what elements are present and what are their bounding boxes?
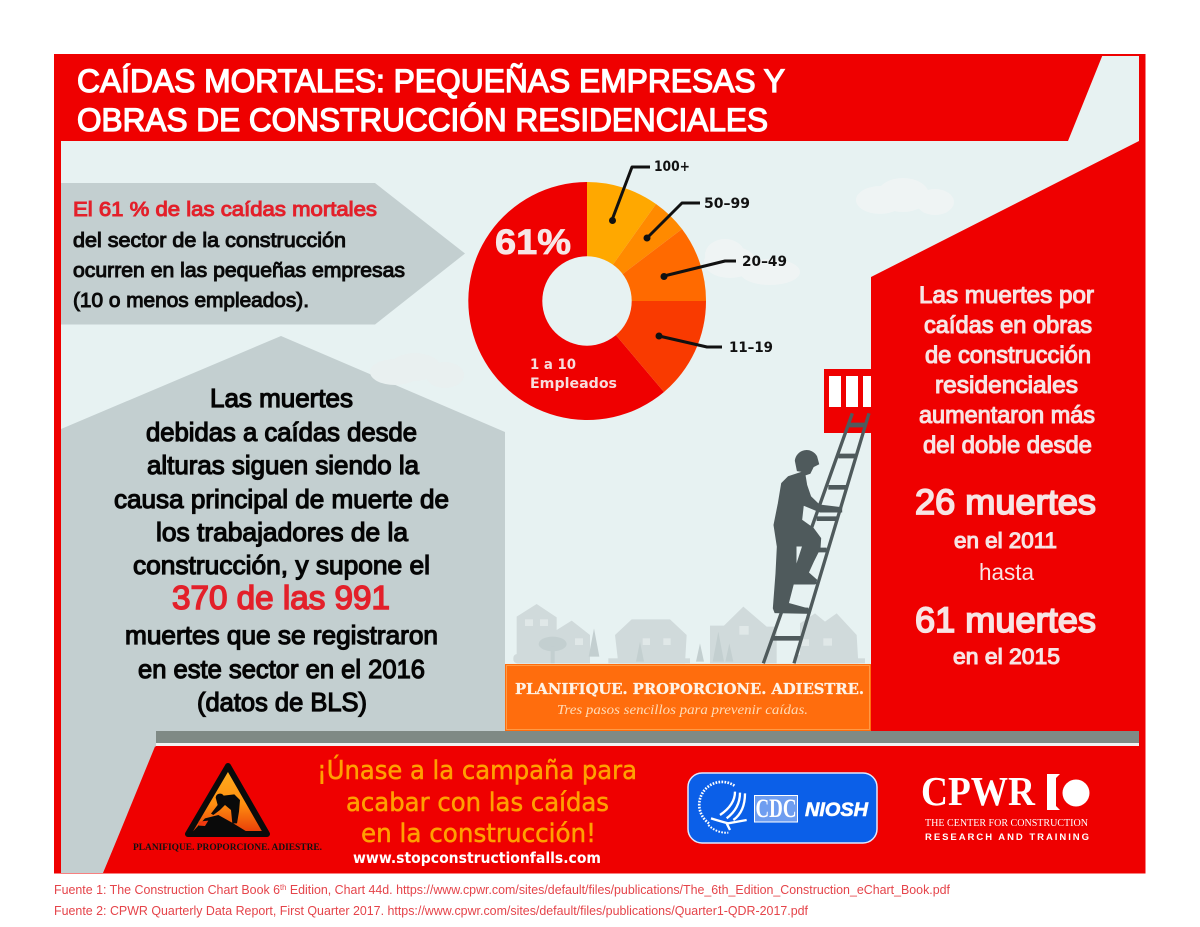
slogan: PLANIFIQUE. PROPORCIONE. ADIESTRE. <box>515 680 864 698</box>
right panel text: caídas en obras <box>924 312 1092 339</box>
bottom red band <box>103 746 1145 874</box>
label: 61%: 61% <box>495 223 571 262</box>
right panel text: 26 muertes <box>915 483 1096 522</box>
leader: 50-99 <box>644 196 750 242</box>
icon: warning triangle with worker <box>133 766 322 853</box>
slice: 100+ <box>587 182 656 301</box>
main statement text: causa principal de muerte de <box>114 484 449 514</box>
slice: 50-99 <box>587 204 682 301</box>
leader: 100+: 100+ <box>654 159 690 175</box>
label: 1 a 10 empleados: 1 a 10 <box>530 357 576 373</box>
right panel text: aumentaron más <box>919 402 1095 429</box>
label: 1 a 10 empleados <box>530 357 617 392</box>
leader: 20-49 <box>660 254 787 280</box>
main statement text: (datos de BLS) <box>197 687 367 717</box>
right panel text: de construcción <box>925 342 1091 369</box>
icon: worker silhouette <box>773 451 842 613</box>
icon: HHS eagle <box>699 782 747 833</box>
subtitle: Tres pasos sencillos para prevenir caídas. <box>557 703 808 718</box>
right panel text: del doble desde <box>923 432 1092 459</box>
source notes: Fuente 2: CPWR Quarterly Data Report, First Quarter 2017. https://www.cpwr.com/sites/default/files/publications/Quarter1-QDR-2017.pdf <box>54 903 808 918</box>
cloud over roof <box>370 353 464 388</box>
right panel text: 61 muertes <box>915 601 1096 640</box>
label: 1 a 10 empleados: Empleados <box>530 376 617 392</box>
campaign call to action <box>317 754 637 867</box>
leader: 20-49: 20–49 <box>742 254 787 270</box>
right panel text: en el 2011 <box>954 528 1057 553</box>
source notes: Edition, Chart 44d. https://www.cpwr.com/sites/default/files/publications/The_6th_Edition_Construction_eChart_Book.pdf <box>286 882 950 897</box>
slice: 11-19 <box>587 301 706 392</box>
panel: gray house with main statement <box>61 336 505 873</box>
main statement text: en este sector en el 2016 <box>138 654 425 684</box>
leader: 11-19: 11–19 <box>729 340 773 356</box>
panel: orange slogan box <box>505 664 871 731</box>
main statement text: los trabajadores de la <box>156 517 409 547</box>
sky panel <box>61 56 1139 745</box>
logo: CPWR: RESEARCH AND TRAINING <box>925 832 1089 843</box>
main statement text: 370 de las 991 <box>172 579 390 616</box>
source notes <box>54 882 950 918</box>
title <box>77 63 785 138</box>
callout text: (10 o menos empleados). <box>73 289 309 312</box>
campaign call to action: ¡Únase a la campaña para <box>317 754 637 786</box>
NIOSH wordmark: NIOSH <box>805 800 869 821</box>
source notes: th <box>280 883 286 892</box>
CDC mark: CDC <box>756 794 796 823</box>
right panel text: residenciales <box>935 372 1078 399</box>
logo: CPWR <box>921 768 1090 843</box>
main statement text: muertes que se registraron <box>125 620 438 650</box>
slice: 20-49 <box>587 229 706 301</box>
logo: CPWR: THE CENTER FOR CONSTRUCTION <box>925 818 1088 829</box>
main statement text <box>114 383 449 717</box>
clouds <box>704 178 954 285</box>
donut chart <box>468 159 787 420</box>
main statement text: debidas a caídas desde <box>146 417 417 447</box>
main statement text: Las muertes <box>210 383 353 413</box>
logo: CDC NIOSH <box>688 773 877 843</box>
slice: 1 a 10 <box>468 182 664 420</box>
triangle slogan: PLANIFIQUE. PROPORCIONE. ADIESTRE. <box>133 843 322 853</box>
right panel text: Las muertes por <box>919 282 1094 309</box>
right panel text: en el 2015 <box>953 644 1060 669</box>
campaign call to action: en la construcción! <box>361 819 596 849</box>
right panel text <box>915 282 1096 669</box>
icon: ladder <box>763 413 869 663</box>
leader: 100+ <box>609 159 690 224</box>
panel: arrow callout 61% <box>61 183 465 324</box>
title: CAÍDAS MORTALES: PEQUEÑAS EMPRESAS Y <box>77 63 785 99</box>
website: www.stopconstructionfalls.com <box>353 849 601 867</box>
title: OBRAS DE CONSTRUCCIÓN RESIDENCIALES <box>77 102 768 138</box>
red window <box>824 369 871 433</box>
callout text: del sector de la construcción <box>73 229 346 252</box>
callout text: ocurren en las pequeñas empresas <box>73 259 405 282</box>
callout text: El 61 % de las caídas mortales <box>73 198 377 221</box>
leader: 50-99: 50–99 <box>704 196 750 212</box>
callout text <box>73 198 405 312</box>
source notes: Fuente 1: The Construction Chart Book 6 <box>54 882 291 897</box>
panel: right red house <box>871 141 1145 745</box>
main statement text: alturas siguen siendo la <box>147 450 420 480</box>
ground bar <box>156 731 1139 746</box>
campaign call to action: acabar con las caídas <box>346 788 609 818</box>
main statement text: construcción, y supone el <box>133 550 430 580</box>
leader: 11-19 <box>656 332 773 356</box>
logo: CPWR: CPWR <box>921 768 1035 814</box>
neighbourhood houses <box>513 604 865 663</box>
right panel text: hasta <box>979 559 1034 585</box>
header banner <box>54 54 1103 141</box>
donut hole <box>542 256 632 346</box>
